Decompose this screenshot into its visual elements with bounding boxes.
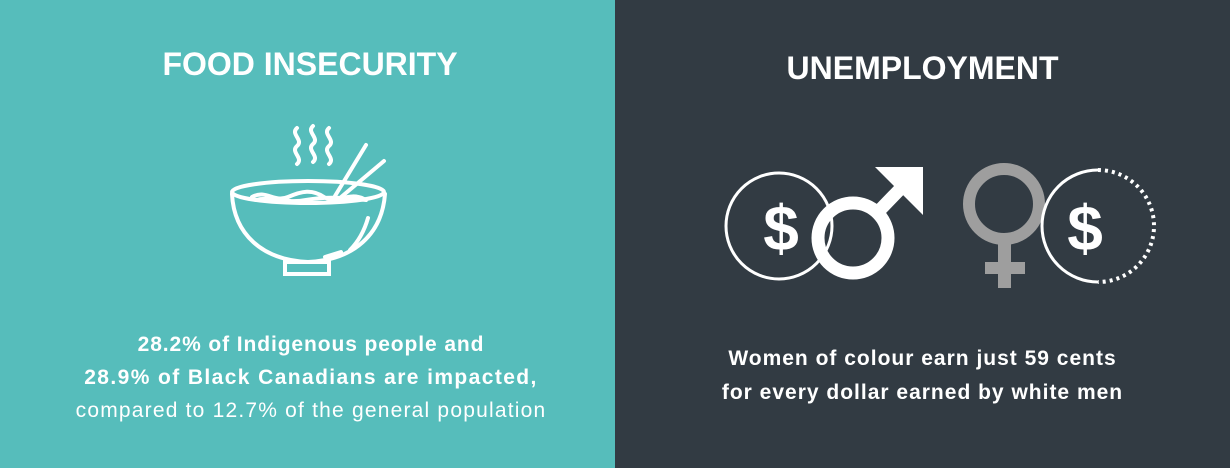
text: statistics: compared to 12.7% of the general population <box>76 399 546 422</box>
panel: unemployment <box>615 0 1230 468</box>
panel: food insecurity <box>0 0 615 468</box>
text: statistics: 28.2% of Indigenous people and <box>138 333 484 356</box>
text: wage gap <box>722 347 1123 404</box>
icon: noodle bowl <box>230 124 387 276</box>
icon: gender pay gap: $ <box>763 192 799 264</box>
heading: food insecurity: FOOD INSECURITY <box>162 46 458 82</box>
text: wage gap: for every dollar earned by white men <box>722 381 1123 404</box>
heading: unemployment: UNEMPLOYMENT <box>786 50 1058 86</box>
icon: gender pay gap: $ <box>1067 192 1103 264</box>
text: statistics: 28.9% of Black Canadians are impacted, <box>84 366 538 389</box>
text: statistics <box>76 333 546 422</box>
text: wage gap: Women of colour earn just 59 cents <box>728 347 1117 370</box>
